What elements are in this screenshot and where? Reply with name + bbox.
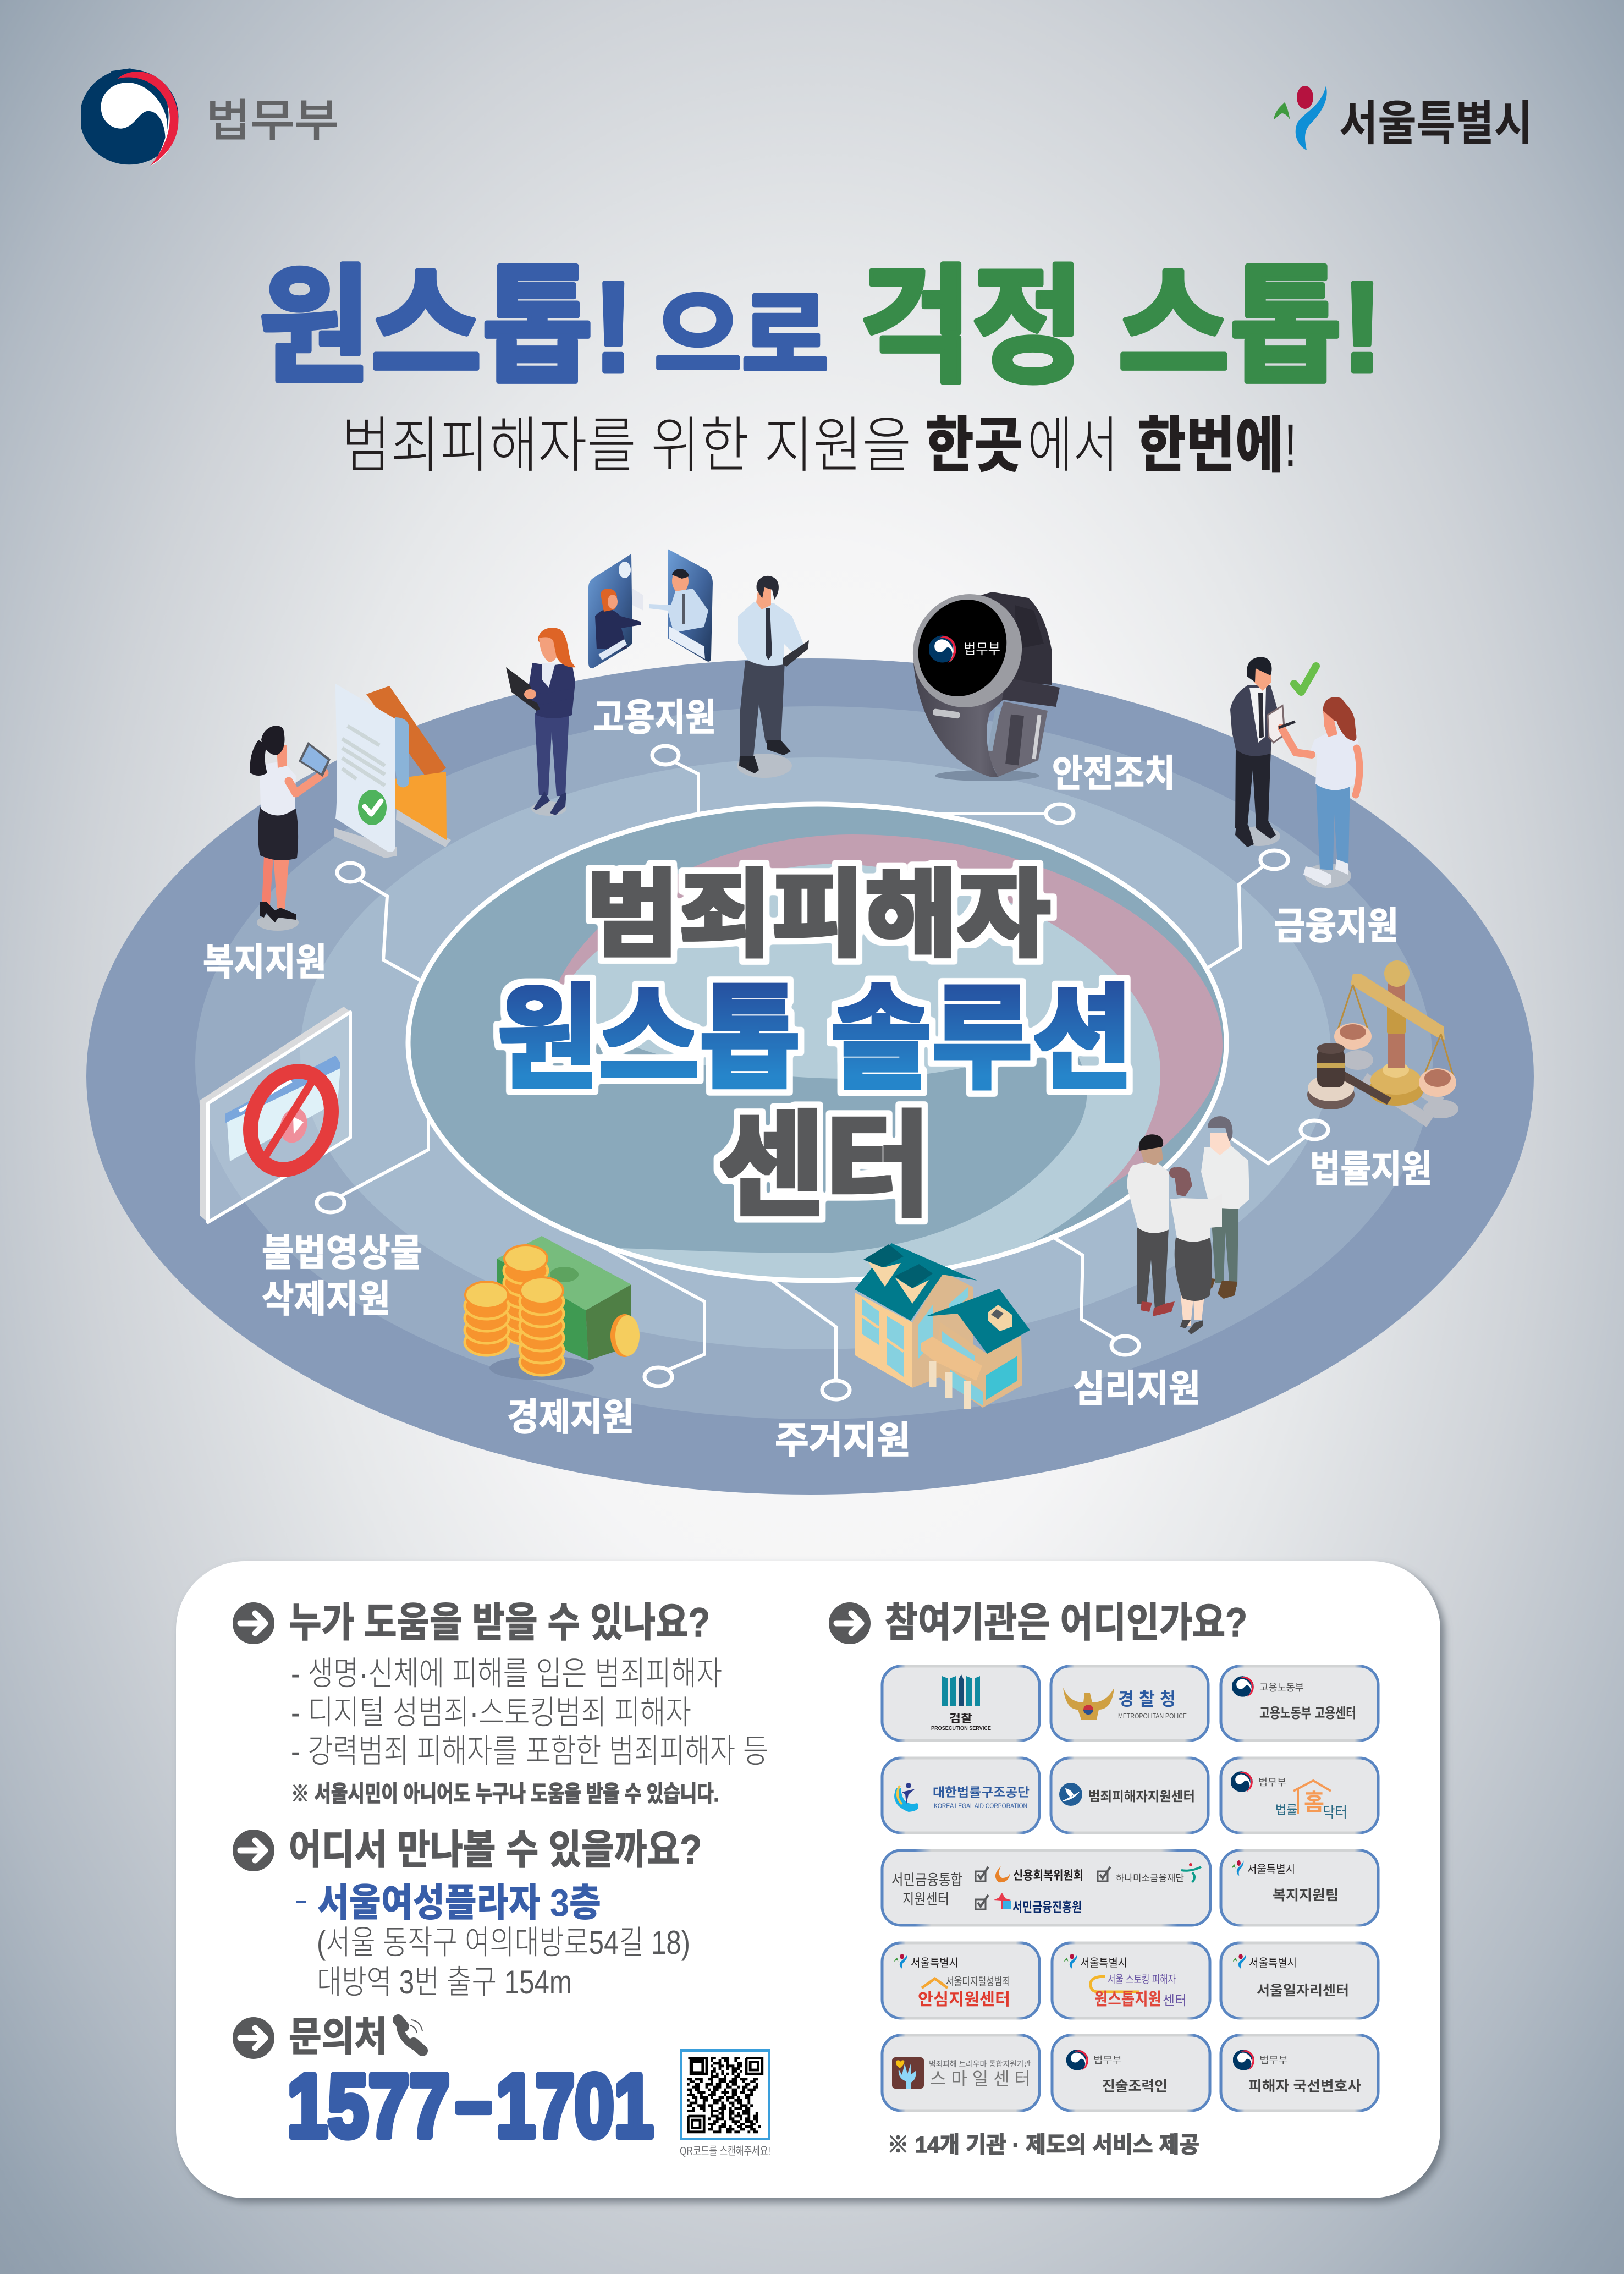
card: 안심지원센터: 서울디지털성범죄 [946, 1975, 1010, 1988]
center heading: 범죄피해자 [586, 863, 1050, 968]
illustration: woman signing [1279, 697, 1361, 888]
card: 법률홈닥터: 닥터 [1323, 1804, 1347, 1821]
illustration: man with tablet [737, 576, 809, 778]
label: 주거지원: 주거지원 [775, 1420, 911, 1462]
label: 경제지원: 경제지원 [507, 1397, 634, 1438]
title: 걱정 스톱! [860, 256, 1383, 399]
card: 고용노동부 고용센터: 고용노동부 [1259, 1682, 1304, 1693]
card: 복지지원팀: 서울특별시 [1247, 1863, 1295, 1876]
illustration: blocked illegal video [200, 1007, 350, 1222]
illustration: smart watch: 법무부 [964, 641, 1000, 657]
card: 안심지원센터: 안심지원센터 [918, 1991, 1010, 2009]
card: 서민금융통합지원센터: 지원센터 [902, 1891, 949, 1908]
section: where to meet [233, 1827, 702, 2001]
center swirl disc [385, 804, 1226, 1287]
card: 검찰 [882, 1666, 1039, 1740]
card: 고용노동부 고용센터: 고용노동부 고용센터 [1259, 1706, 1356, 1721]
card: 대한법률구조공단: KOREA LEGAL AID CORPORATION [934, 1802, 1027, 1810]
card: 안심지원센터: 서울특별시 [911, 1957, 959, 1969]
section: who can get help: - 강력범죄 피해자를 포함한 범죄피해자 등 [291, 1733, 768, 1770]
illustration: video call phones [588, 549, 713, 668]
card: 원스톱지원센터 [1052, 1943, 1210, 2018]
center heading: 원스톱 솔루션 [498, 976, 1133, 1102]
label: 불법영상물 삭제지원: 삭제지원 [262, 1278, 390, 1320]
card: 안심지원센터 [882, 1943, 1039, 2018]
connector: 금융지원 [1207, 850, 1288, 968]
icon: green check mark [1294, 666, 1316, 692]
center heading: 센터 [719, 1103, 931, 1231]
subtitle: 범죄피해자를 위한 지원을 [342, 412, 911, 480]
label: 금융지원: 금융지원 [1274, 905, 1399, 947]
connector: 고용지원 [652, 746, 698, 812]
card: 스마일센터 [882, 2035, 1039, 2111]
card: 서민금융통합지원센터 [882, 1850, 1210, 1925]
card: 진술조력인: 진술조력인 [1102, 2079, 1168, 2094]
logo: Ministry of Justice [80, 68, 339, 166]
illustration: woman with tablet [250, 726, 331, 931]
connector: 안전조치 [933, 804, 1074, 823]
title: 으로 [654, 284, 829, 391]
section: contact [233, 2014, 653, 2156]
phone number: 1701 [496, 2056, 653, 2156]
card: 대한법률구조공단: 대한법률구조공단 [933, 1786, 1030, 1799]
card: 검찰: 검찰 [949, 1712, 972, 1724]
QR code: QR코드를 스캔해주세요! [680, 2145, 770, 2157]
subtitle [342, 412, 1297, 480]
section: who can get help [233, 1600, 768, 1806]
phone number [287, 2051, 653, 2156]
label: 고용지원: 고용지원 [593, 697, 716, 739]
QR code [680, 2051, 770, 2157]
illustration: man in suit with clipboard [1230, 657, 1285, 847]
phone number: - [453, 2051, 494, 2150]
section: where to meet: 서울여성플라자 3층 [317, 1881, 601, 1924]
illustration: document and envelope [334, 684, 451, 858]
title: 원스톱! [259, 256, 634, 399]
section: who can get help: - 디지털 성범죄·스토킹범죄 피해자 [291, 1694, 691, 1731]
card: 복지지원팀: 복지지원팀 [1273, 1888, 1339, 1903]
card: 피해자 국선변호사: 법무부 [1259, 2055, 1288, 2066]
card: 대한법률구조공단 [882, 1758, 1039, 1833]
section: where to meet: 대방역 3번 출구 154m [317, 1964, 572, 2001]
subtitle: 에서 [1027, 412, 1119, 480]
card: 서민금융통합지원센터: 서민금융진흥원 [1012, 1900, 1082, 1915]
card: 스마일센터: 범죄피해 트라우마 통합지원기관 [929, 2059, 1031, 2068]
card: 피해자 국선변호사 [1221, 2035, 1378, 2111]
panel shadow [180, 1566, 1445, 2202]
section: contact: 문의처 [289, 2014, 387, 2059]
label: 심리지원: 심리지원 [1073, 1368, 1201, 1410]
connector: 심리지원 [1055, 1238, 1139, 1355]
section heading: participating institutions: 참여기관은 어디인가요? [885, 1600, 1247, 1645]
label: 법률지원: 법률지원 [1310, 1149, 1432, 1190]
section: where to meet: (서울 동작구 여의대방로54길 18) [317, 1924, 690, 1961]
card: 법률홈닥터: 법률 [1275, 1803, 1297, 1817]
card: 법률홈닥터: 법무부 [1258, 1777, 1286, 1788]
section: where to meet: 어디서 만나볼 수 있을까요? [289, 1827, 702, 1872]
note: 14 institutions: ※ 14개 기관 · 제도의 서비스 제공 [887, 2132, 1199, 2157]
card: 진술조력인: 법무부 [1093, 2055, 1122, 2066]
panel: information card [176, 1561, 1440, 2198]
connector: 불법영상물 삭제지원 [317, 1117, 428, 1212]
card: 경찰청: 경 찰 청 [1118, 1689, 1176, 1709]
card: 원스톱지원센터: 센터 [1163, 1993, 1187, 2008]
card: 법률홈닥터 [1221, 1758, 1378, 1833]
logo: Seoul Metropolitan Government: 서울특별시 [1339, 97, 1533, 150]
label: 안전조치: 안전조치 [1052, 753, 1175, 795]
card: 원스톱지원센터: 원스톱지원 [1094, 1990, 1161, 2009]
label: 복지지원: 복지지원 [203, 942, 327, 984]
card: 범죄피해자지원센터 [1051, 1758, 1208, 1833]
card: 서울일자리센터: 서울특별시 [1249, 1957, 1297, 1969]
card: 서민금융통합지원센터: 서민금융통합 [891, 1872, 962, 1888]
illustration: three people consulting [1127, 1116, 1249, 1334]
subtitle: 한곳 [925, 412, 1023, 480]
label: 불법영상물 삭제지원: 불법영상물 [262, 1232, 422, 1274]
phone number: 1577 [287, 2056, 450, 2156]
card: 경찰청 [1051, 1666, 1208, 1740]
card: 범죄피해자지원센터: 범죄피해자지원센터 [1088, 1789, 1195, 1804]
card: 서민금융통합지원센터: 신용회복위원회 [1013, 1869, 1083, 1882]
connector: 경제지원 [591, 1240, 704, 1386]
card: 피해자 국선변호사: 피해자 국선변호사 [1248, 2079, 1361, 2094]
title [259, 256, 1383, 399]
connector: 주거지원 [772, 1281, 850, 1399]
section: who can get help: - 생명·신체에 피해를 입은 범죄피해자 [291, 1655, 722, 1692]
card: 법률홈닥터: 홈 [1304, 1789, 1324, 1815]
illustration: money and coins [465, 1236, 640, 1380]
section: who can get help: 누가 도움을 받을 수 있나요? [289, 1600, 710, 1645]
card: 원스톱지원센터: 서울특별시 [1080, 1957, 1127, 1969]
card: 원스톱지원센터: 서울 스토킹 피해자 [1108, 1973, 1176, 1986]
card: 경찰청: METROPOLITAN POLICE [1118, 1712, 1187, 1720]
connector: 법률지원 [1230, 1120, 1328, 1163]
connector: 복지지원 [337, 863, 420, 980]
section: who can get help: ※ 서울시민이 아니어도 누구나 도움을 받을 수 있습니다. [291, 1781, 719, 1806]
card: 서울일자리센터 [1221, 1943, 1378, 2018]
illustration: woman in navy suit [506, 628, 576, 816]
card: 서민금융통합지원센터: 하나미소금융재단 [1116, 1873, 1184, 1883]
subtitle: 한번에 [1137, 412, 1284, 480]
logo: Ministry of Justice: 법무부 [206, 96, 339, 145]
card: 복지지원팀 [1221, 1850, 1378, 1925]
illustration: house [855, 1243, 1030, 1409]
card: 검찰: PROSECUTION SERVICE [931, 1726, 991, 1732]
icon: phone [398, 2020, 422, 2051]
center heading [498, 863, 1133, 1231]
card: 서울일자리센터: 서울일자리센터 [1257, 1983, 1349, 1998]
subtitle: ! [1284, 412, 1297, 480]
logo: Seoul Metropolitan Government [1274, 86, 1533, 150]
card: 고용노동부 고용센터 [1221, 1666, 1378, 1740]
card: 진술조력인 [1052, 2035, 1210, 2111]
card: 스마일센터: 스 마 일 센 터 [930, 2069, 1031, 2089]
illustration: scales and gavel [1307, 960, 1458, 1122]
concentric platform rings [86, 658, 1534, 1495]
label: 불법영상물 삭제지원 [262, 1232, 422, 1320]
illustration: smart watch [894, 576, 1060, 781]
